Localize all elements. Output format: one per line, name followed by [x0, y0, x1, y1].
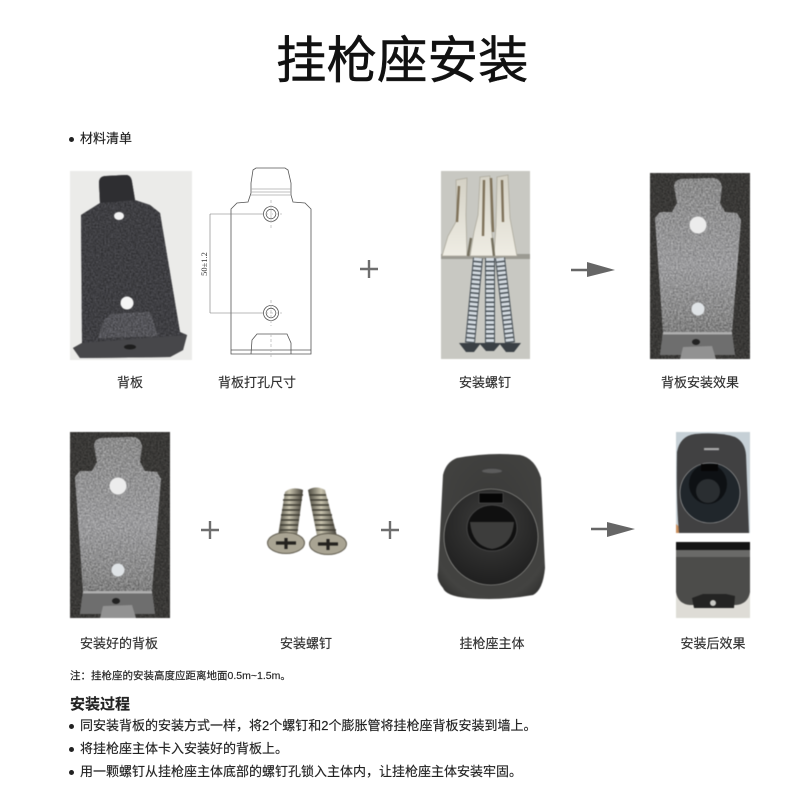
icon: plus 1 — [360, 260, 378, 278]
icon: plus 3 — [381, 521, 399, 539]
photo: two mounting screws — [268, 488, 346, 554]
icon: plus 2 — [201, 521, 219, 539]
drawing: back plate hole dimensions — [199, 168, 311, 358]
step 3: 用一颗螺钉从挂枪座主体底部的螺钉孔锁入主体内，让挂枪座主体安装牢固。 — [80, 764, 522, 779]
photo: charger holster body — [438, 454, 545, 599]
step 1: 同安装背板的安装方式一样，将2个螺钉和2个膨胀管将挂枪座背板安装到墙上。 — [80, 718, 536, 733]
photo: installed result, front — [676, 432, 750, 533]
label: back plate: 背板 — [117, 375, 143, 390]
drawing: back plate hole dimensions: 50±1.2 — [199, 252, 209, 276]
photo: back plate — [70, 171, 192, 360]
label: final result: 安装后效果 — [680, 636, 746, 651]
step 2: 将挂枪座主体卡入安装好的背板上。 — [80, 741, 288, 756]
note: 注：挂枪座的安装高度应距离地面0.5m~1.5m。 — [70, 670, 291, 682]
arrow 1 — [571, 262, 615, 277]
label: mounting screws: 安装螺钉 — [280, 636, 332, 651]
label: installation screws: 安装螺钉 — [459, 375, 511, 390]
arrow 2 — [591, 522, 635, 537]
title: 挂枪座安装 — [276, 32, 528, 89]
label: hole dimensions: 背板打孔尺寸 — [218, 375, 296, 390]
step list — [69, 718, 536, 779]
photo: installation screws and anchors — [441, 171, 530, 359]
label: installed plate: 安装好的背板 — [80, 636, 158, 651]
photo: installed back plate — [650, 173, 750, 359]
heading: materials list: 材料清单 — [80, 131, 132, 146]
label: plate result: 背板安装效果 — [661, 375, 739, 390]
photo: installed back plate, second row — [70, 432, 170, 618]
photo: installed result, bottom — [676, 542, 750, 618]
heading: installation process: 安装过程 — [70, 696, 130, 713]
label: holster body: 挂枪座主体 — [459, 636, 525, 651]
